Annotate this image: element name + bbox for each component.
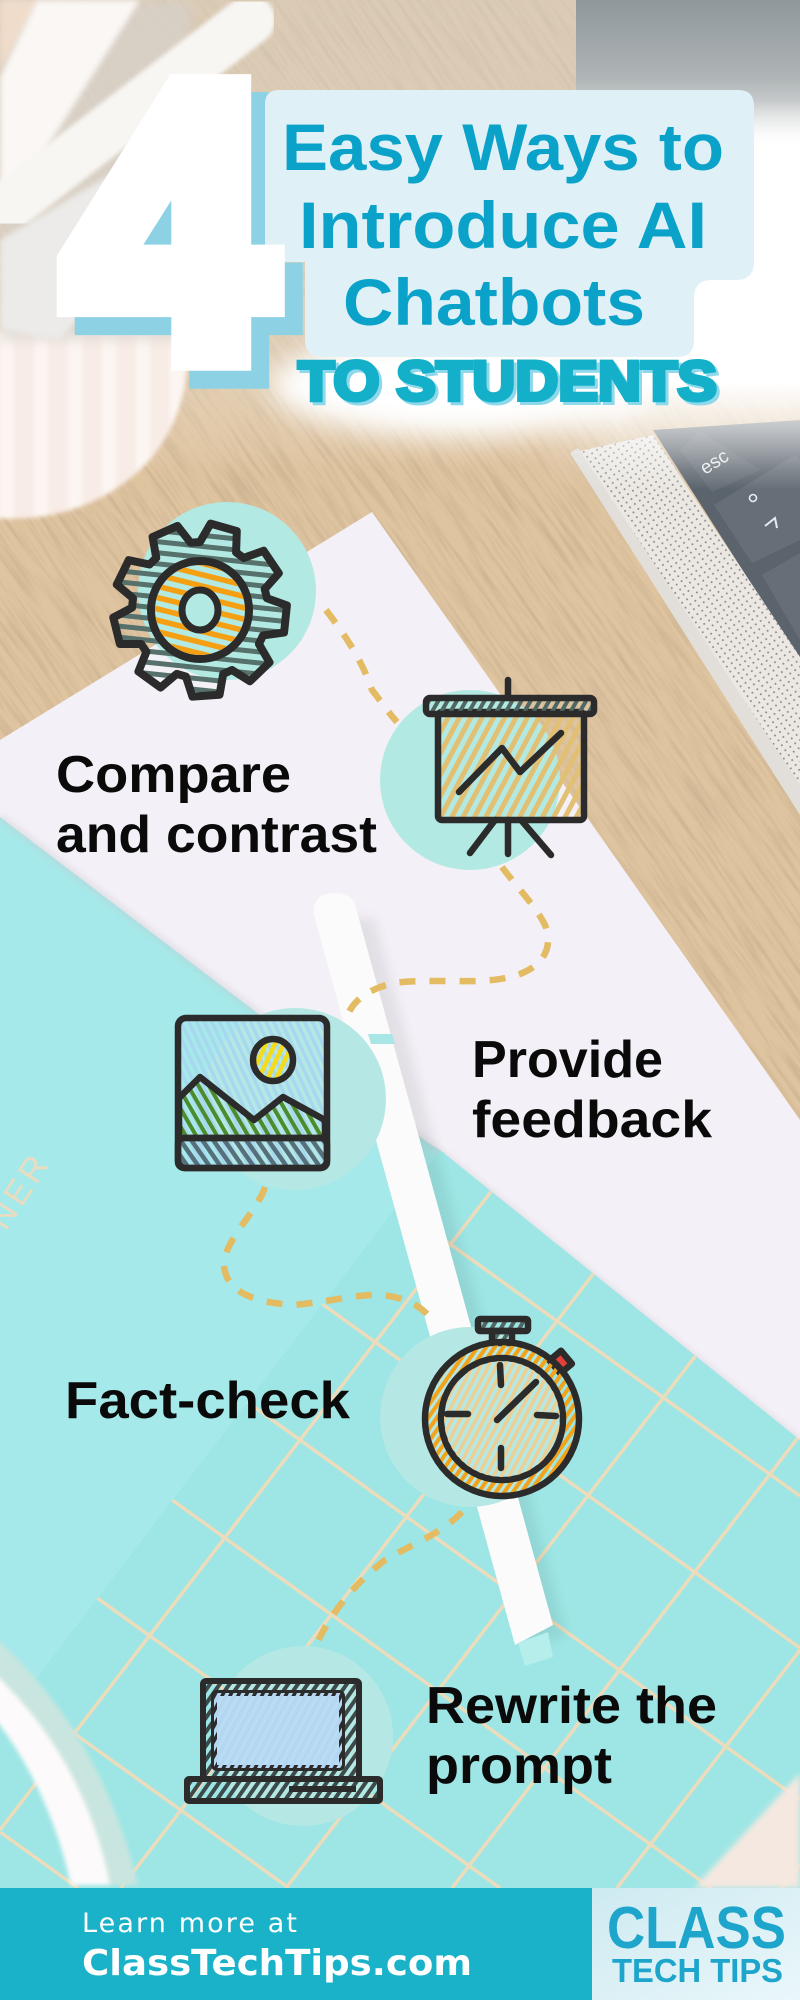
step 4: stopwatch icon: [380, 1319, 579, 1507]
title text: Chatbots: [343, 265, 645, 339]
pen cup: [0, 330, 189, 519]
step 5 label: [426, 1677, 717, 1795]
step 3: picture icon: [178, 1008, 386, 1190]
step 5 label: Rewrite the: [426, 1677, 717, 1735]
footer bar: [0, 1888, 592, 2000]
step 5 label: prompt: [426, 1737, 612, 1795]
connector 1: [326, 610, 397, 722]
footer logo: [592, 1888, 800, 2000]
step 2 label: [472, 1031, 712, 1149]
teal notebook: [0, 790, 800, 1888]
title: big number 4: 4: [67, 9, 273, 436]
title text: Introduce AI: [299, 188, 707, 262]
step 1 label: Compare: [56, 746, 291, 804]
pens in the cup: [0, 0, 250, 340]
connector 4: [316, 1512, 462, 1645]
title panel: [265, 90, 754, 357]
dashed connector paths: [224, 610, 548, 1645]
title subtitle: to students: TO STUDENTS: [298, 349, 717, 412]
wood desk: [0, 0, 800, 1120]
step 5: laptop icon: [187, 1646, 393, 1826]
step 2: presentation board icon: [380, 680, 594, 870]
notebook grid lines: [0, 1190, 800, 1888]
blurred corner, bottom right: [694, 1773, 800, 1888]
footer logo: TECH TIPS: [612, 1952, 783, 1989]
footer text: learn more: Learn more at: [82, 1908, 297, 1939]
footer text: website: ClassTechTips.com: [82, 1943, 472, 1984]
white glow behind the title: [270, 0, 800, 490]
white bowl rim, bottom left: [0, 1637, 138, 1885]
title subtitle: to students: TO STUDENTS: [301, 352, 720, 415]
laptop: [570, 420, 800, 815]
step 2 label: Provide: [472, 1031, 663, 1089]
step 1: gear icon: [107, 502, 316, 702]
connector 2: [349, 867, 548, 1012]
top haze over the desk: [0, 0, 800, 470]
title text: [282, 110, 724, 339]
step 3 label: Fact-check: [65, 1372, 350, 1430]
step 2 label: feedback: [472, 1091, 712, 1149]
connector 3: [224, 1187, 434, 1322]
paper sheet: [0, 512, 800, 1500]
title text: Easy Ways to: [282, 110, 724, 184]
step 1 label: and contrast: [56, 806, 377, 864]
step 1 label: [56, 746, 377, 864]
pen: [314, 893, 566, 1666]
title: big number 4 shadow: 4: [85, 27, 291, 454]
laptop: esc: [697, 446, 733, 479]
